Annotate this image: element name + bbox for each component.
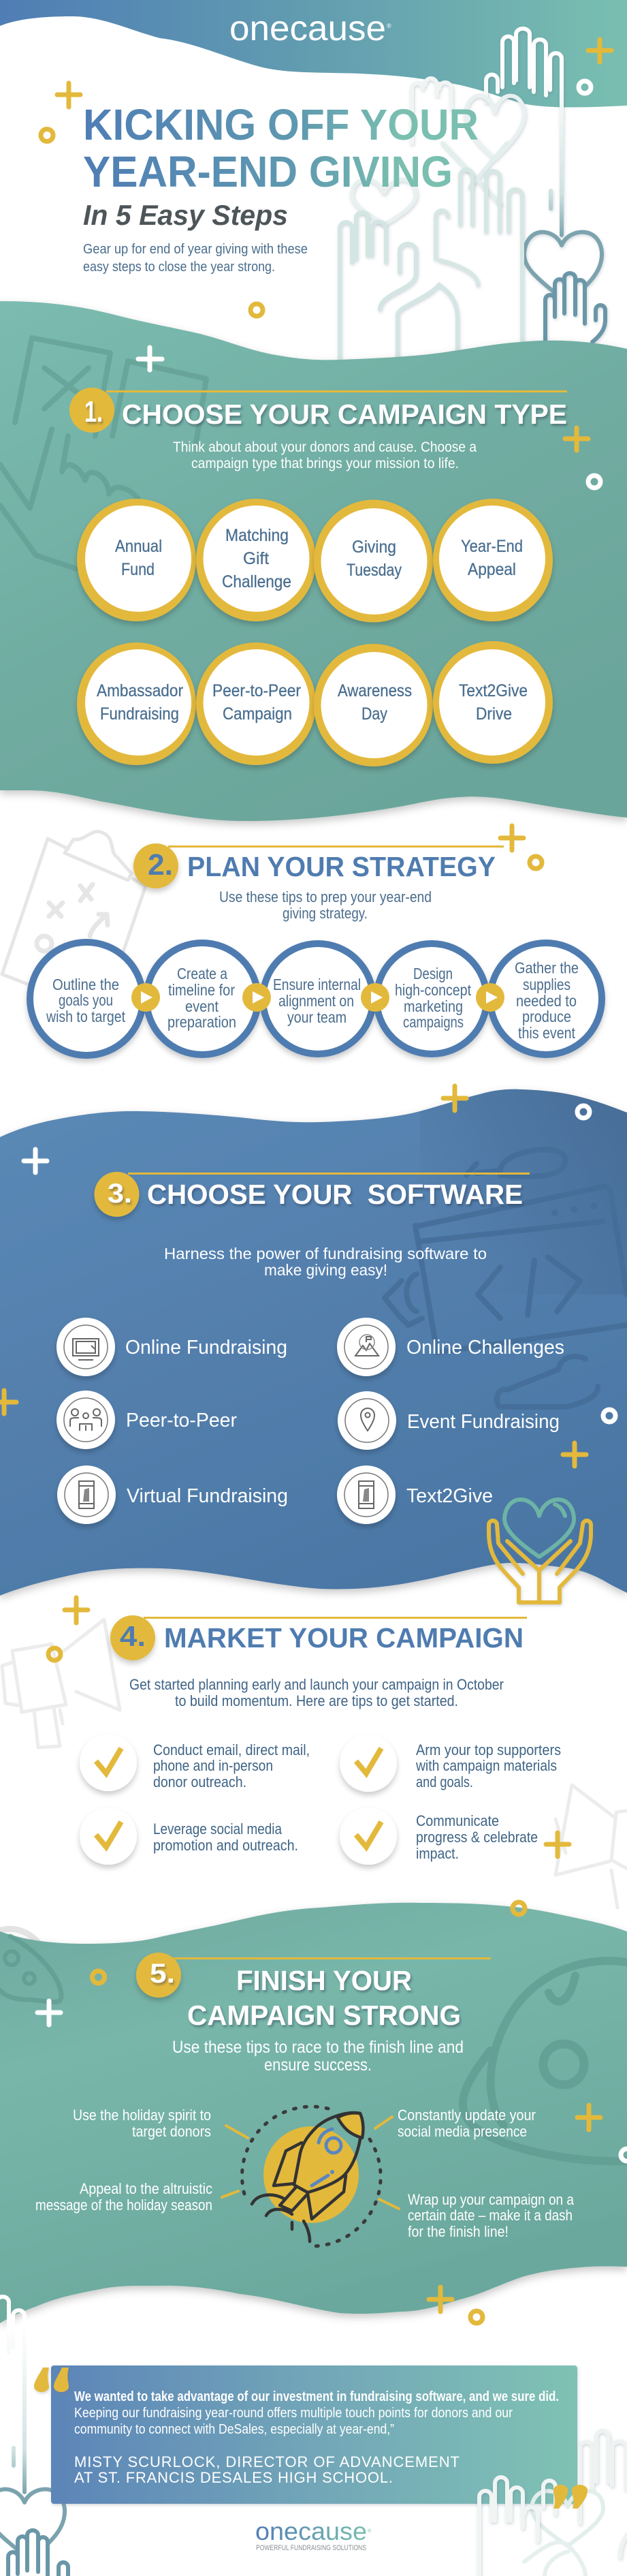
- text: step 4 intro: [129, 1676, 504, 1709]
- text: step 4 intro: Get started planning early and launch your campaign in October: [129, 1676, 504, 1693]
- text: step 4 intro: to build momentum. Here are tips to get started.: [175, 1692, 458, 1709]
- tip: communicate: progress & celebrate: [416, 1829, 538, 1846]
- circle: Year-End Appeal: Year-End: [461, 537, 523, 556]
- circle: Matching Gift Challenge: [196, 499, 316, 621]
- text: step 5 intro: Use these tips to race to the finish line and: [172, 2038, 464, 2057]
- title: [83, 100, 479, 196]
- item: Peer-to-Peer: [57, 1391, 237, 1449]
- panel: step 3 background: [0, 1089, 627, 1596]
- item: Event Fundraising: Event Fundraising: [407, 1411, 560, 1433]
- tip text: altruistic: [35, 2180, 212, 2214]
- heading: step 3: CHOOSE YOUR SOFTWARE: [147, 1179, 523, 1210]
- step circle: timeline: Create a: [177, 965, 227, 982]
- icon: megaphone left: [2, 1619, 120, 1748]
- tip text: wrap up: certain date – make it a dash: [408, 2207, 573, 2224]
- title: KICKING OFF YOUR: [83, 100, 479, 149]
- pale middle hand: [436, 170, 522, 358]
- icon: opening quotation mark: [34, 2368, 69, 2392]
- intro text: Gear up for end of year giving with these: [83, 242, 308, 257]
- tip text: altruistic: Appeal to the altruistic: [80, 2180, 212, 2197]
- heading: step 1: 1.: [84, 395, 103, 429]
- heading: step 5: CAMPAIGN STRONG: [187, 2000, 461, 2031]
- circle: Annual Fund: [77, 499, 196, 621]
- strategy steps chain: [30, 942, 602, 1055]
- tip text: altruistic: message of the holiday season: [35, 2197, 212, 2214]
- text: step 1 intro: campaign type that brings your mission to life.: [191, 456, 459, 471]
- tip: supporters: and goals.: [416, 1773, 473, 1790]
- item: Online Challenges: [337, 1318, 564, 1376]
- attribution: [74, 2453, 460, 2486]
- title: YEAR-END GIVING: [83, 147, 453, 196]
- tip: communicate: [340, 1807, 538, 1865]
- circle: Text2Give Drive: [433, 641, 553, 764]
- circle: Year-End Appeal: [433, 499, 553, 621]
- step circle: design: Design: [413, 965, 453, 982]
- text: step 2 intro: Use these tips to prep your year-end: [219, 888, 432, 905]
- heading: step 4: [110, 1615, 527, 1660]
- heading: step 1: CHOOSE YOUR CAMPAIGN TYPE: [122, 399, 567, 430]
- tip: social media: promotion and outreach.: [153, 1837, 298, 1854]
- icon: background checklist and hand: [0, 338, 206, 569]
- item: Online Fundraising: Online Fundraising: [125, 1337, 287, 1359]
- tip text: holiday spirit: [73, 2107, 211, 2140]
- quote text: [74, 2389, 559, 2437]
- item: Online Fundraising: [57, 1318, 287, 1376]
- logo: onecause: onecause: [229, 9, 386, 48]
- intro text: [83, 242, 308, 275]
- step circle: supplies: this event: [518, 1024, 576, 1042]
- tip text: holiday spirit: target donors: [132, 2123, 211, 2140]
- logo: onecause footer: onecause: [255, 2517, 367, 2545]
- arrow buttons between steps: [131, 983, 504, 1012]
- decoration: plus and ring marks, header: [41, 40, 611, 316]
- plus and ring marks, lower white band: [429, 2287, 483, 2323]
- icon: pale hands and heart, bottom right: [479, 2431, 627, 2576]
- circle: Ambassador Fundraising: Fundraising: [100, 704, 179, 724]
- illustration: raised hands and hearts: [340, 29, 605, 358]
- circle: Matching Gift Challenge: Gift: [243, 549, 269, 568]
- icon: background planets: [0, 1936, 627, 2161]
- text: step 5 intro: [172, 2038, 464, 2075]
- circle: Text2Give Drive: Drive: [476, 704, 512, 724]
- icon: heart held by hands: [489, 1500, 591, 1602]
- heading: step 5: [136, 1953, 491, 2031]
- item: Event Fundraising: [338, 1391, 560, 1450]
- attribution: AT ST. FRANCIS DESALES HIGH SCHOOL.: [74, 2469, 393, 2486]
- step circle: supplies: produce: [522, 1008, 571, 1025]
- tip text: social media: [398, 2107, 536, 2140]
- tip text: wrap up: for the finish line!: [408, 2223, 509, 2240]
- quote text: community to connect with DeSales, especially at year-end,”: [74, 2422, 394, 2437]
- heading: step 4: 4.: [120, 1620, 146, 1652]
- step circle: alignment: Ensure internal: [273, 976, 361, 993]
- circle: Giving Tuesday: Tuesday: [347, 561, 402, 580]
- step circle: supplies: [490, 943, 602, 1055]
- campaign type circles: [77, 499, 553, 766]
- heading: step 5: FINISH YOUR: [236, 1965, 412, 1996]
- item: Virtual Fundraising: Virtual Fundraising: [127, 1485, 288, 1507]
- text: step 2 intro: giving strategy.: [283, 905, 368, 922]
- plus mark, step 1: [138, 347, 162, 370]
- icon: background browser, gear and wrench: [385, 1149, 627, 1407]
- icon: megaphone right: [556, 1785, 627, 1908]
- step circle: outline goals: goals you: [59, 991, 113, 1009]
- tip: communicate: impact.: [416, 1845, 459, 1862]
- panel: testimonial quote: [51, 2365, 577, 2504]
- subtitle: In 5 Easy Steps: [83, 199, 288, 231]
- heading: step 2: [133, 843, 504, 888]
- step circle: design: high-concept: [395, 981, 472, 999]
- tip text: wrap up: [408, 2191, 575, 2240]
- heading: step 3: [94, 1172, 530, 1217]
- tip text: social media: Constantly update your: [398, 2107, 536, 2124]
- dots on background browser: [551, 1202, 598, 1216]
- circle: Awareness Day: Awareness: [338, 681, 412, 700]
- tip: social media: Leverage social media: [153, 1820, 283, 1837]
- item: Text2Give: [337, 1465, 493, 1524]
- intro text: easy steps to close the year strong.: [83, 260, 275, 275]
- step circle: alignment: your team: [287, 1008, 347, 1026]
- hand with heart, right: [486, 29, 605, 342]
- circle: Text2Give Drive: Text2Give: [459, 681, 528, 700]
- text: step 3 intro: make giving easy!: [264, 1261, 387, 1279]
- heading: step 1: [69, 388, 567, 433]
- tip: outreach: donor outreach.: [153, 1773, 246, 1790]
- icon: small planet on white: [0, 1929, 44, 1952]
- tip: supporters: Arm your top supporters: [416, 1741, 561, 1758]
- step circle: alignment: [263, 944, 373, 1054]
- circle: Annual Fund: Fund: [121, 560, 155, 579]
- icon: closing quotation mark: [553, 2485, 588, 2509]
- logo: onecause footer: POWERFUL FUNDRAISING SOLUTIONS: [256, 2544, 366, 2552]
- heading: step 4: MARKET YOUR CAMPAIGN: [164, 1622, 524, 1654]
- circle: Matching Gift Challenge: Matching: [225, 526, 289, 545]
- item: Virtual Fundraising: [57, 1465, 288, 1524]
- step circle: outline goals: wish to target: [46, 1008, 126, 1025]
- circle: Ambassador Fundraising: [77, 642, 196, 765]
- circle: Ambassador Fundraising: Ambassador: [97, 681, 183, 700]
- heading: step 3: 3.: [108, 1179, 132, 1209]
- pale heart left: [352, 180, 416, 225]
- step circle: alignment: alignment on: [278, 992, 354, 1010]
- text: step 1 intro: Think about about your donors and cause. Choose a: [173, 439, 477, 455]
- step circle: outline goals: [30, 942, 143, 1055]
- heading: step 2: 2.: [148, 848, 173, 882]
- tip: supporters: with campaign materials: [415, 1757, 557, 1774]
- text: step 3 intro: [164, 1245, 487, 1279]
- plus and ring marks, step 4: [48, 1598, 569, 1857]
- heading: step 2: PLAN YOUR STRATEGY: [187, 851, 496, 882]
- tip text: holiday spirit: Use the holiday spirit to: [73, 2107, 211, 2124]
- tip text: social media: social media presence: [398, 2123, 527, 2140]
- icon: background clipboard: [2, 832, 146, 989]
- step circle: timeline: [146, 943, 258, 1055]
- plus and ring marks, step 1: [565, 428, 600, 488]
- software list: [57, 1318, 564, 1524]
- plus and ring marks, step 5: [37, 1902, 627, 2161]
- plus and ring marks, step 2: [500, 826, 542, 869]
- step circle: timeline: preparation: [167, 1013, 236, 1031]
- circle: Giving Tuesday: Giving: [352, 538, 396, 557]
- text: step 3 intro: Harness the power of fundraising software to: [164, 1245, 487, 1262]
- circle: Peer-to-Peer Campaign: [196, 642, 316, 765]
- text: step 2 intro: [219, 888, 432, 922]
- step circle: timeline: timeline for: [168, 981, 235, 999]
- item: Text2Give: Text2Give: [406, 1485, 493, 1507]
- tip: communicate: Communicate: [416, 1812, 499, 1829]
- tip: supporters: [340, 1735, 561, 1792]
- circle: Awareness Day: [314, 644, 433, 766]
- circle: Matching Gift Challenge: Challenge: [222, 572, 291, 591]
- panel: step 5 background: [0, 1903, 627, 2323]
- tip: outreach: Conduct email, direct mail,: [153, 1741, 310, 1758]
- tip: social media: [80, 1807, 298, 1865]
- step circle: design: [376, 944, 487, 1054]
- step circle: design: campaigns: [403, 1013, 464, 1031]
- pale left hand: [340, 213, 457, 358]
- logo: onecause footer: ®: [368, 2528, 372, 2534]
- marketing checklist: [80, 1734, 561, 1865]
- plus and ring marks, step 3: [0, 1086, 615, 1466]
- pale upper hand and heart: [412, 78, 524, 204]
- logo: onecause: ®: [387, 22, 391, 29]
- step circle: timeline: event: [185, 997, 219, 1015]
- step circle: supplies: Gather the: [515, 959, 579, 977]
- attribution: MISTY SCURLOCK, DIRECTOR OF ADVANCEMENT: [74, 2453, 460, 2470]
- circle: Peer-to-Peer Campaign: Peer-to-Peer: [212, 681, 301, 700]
- step circle: design: marketing: [404, 997, 463, 1015]
- tip: outreach: phone and in-person: [153, 1757, 273, 1774]
- panel: step 1 background: [0, 301, 627, 821]
- heading: step 5: 5.: [150, 1959, 175, 1989]
- step circle: supplies: supplies: [523, 976, 570, 993]
- quote text: Keeping our fundraising year-round offers multiple touch points for donors and our: [74, 2406, 513, 2421]
- icon: rocket with dotted orbit: [222, 2107, 399, 2246]
- step circle: outline goals: Outline the: [52, 976, 119, 993]
- circle: Year-End Appeal: Appeal: [468, 560, 516, 579]
- circle: Giving Tuesday: [314, 500, 433, 623]
- icon: hands and heart, bottom left: [0, 2286, 68, 2576]
- tip text: wrap up: Wrap up your campaign on a: [408, 2191, 575, 2208]
- item: Online Challenges: Online Challenges: [406, 1337, 564, 1359]
- circle: Awareness Day: Day: [361, 704, 387, 724]
- header wave: [0, 0, 627, 108]
- circle: Annual Fund: Annual: [115, 537, 162, 556]
- tip: outreach: [80, 1734, 310, 1791]
- text: step 1 intro: [173, 439, 477, 471]
- circle: Peer-to-Peer Campaign: Campaign: [223, 704, 292, 724]
- step circle: supplies: needed to: [516, 992, 577, 1010]
- item: Peer-to-Peer: Peer-to-Peer: [126, 1410, 237, 1431]
- text: step 5 intro: ensure success.: [264, 2055, 372, 2075]
